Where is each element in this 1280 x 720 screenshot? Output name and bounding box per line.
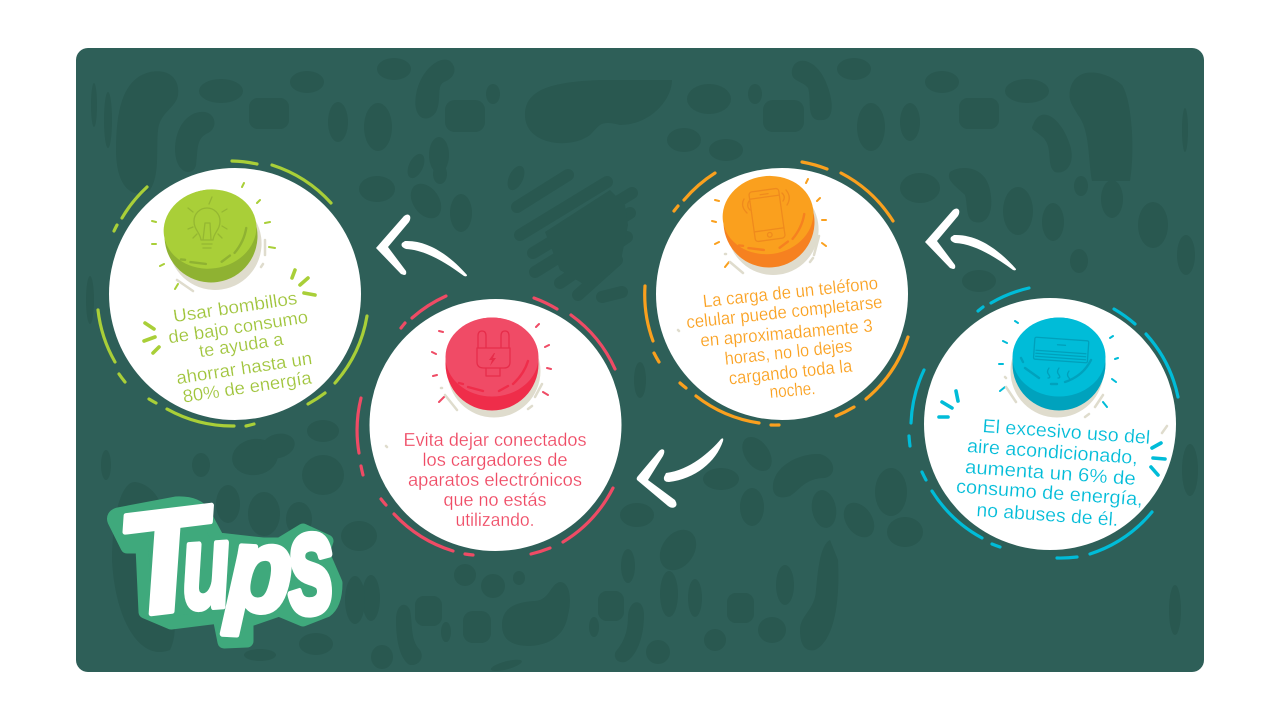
text: tip 4: aumenta un 6% de bbox=[964, 457, 1136, 490]
button bbox=[158, 183, 268, 296]
text: tip 1: Usar bombillos bbox=[172, 288, 298, 326]
text: tip 3: en aproximadamente 3 bbox=[699, 316, 874, 351]
accent sparks bbox=[144, 270, 315, 353]
button bbox=[446, 318, 540, 418]
white disc bbox=[109, 168, 361, 420]
text: tip 2: utilizando. bbox=[456, 510, 534, 530]
text: tip 3: noche. bbox=[769, 378, 816, 402]
text: tip 2: los cargadores de bbox=[422, 450, 568, 470]
dashed ring bbox=[357, 296, 615, 555]
circle: tip 2 chargers bbox=[357, 296, 622, 555]
text: tip 3: celular puede completarse bbox=[685, 292, 883, 332]
arrow: red to green bbox=[376, 214, 467, 276]
text: tip 1 bbox=[167, 288, 314, 407]
shadow marks bbox=[678, 236, 819, 331]
title letters: u bbox=[176, 498, 235, 635]
circle: tip 1 light bulbs bbox=[98, 161, 367, 426]
text: tip 2: Evita dejar conectados bbox=[404, 430, 586, 450]
white disc bbox=[656, 168, 908, 420]
shadow marks bbox=[386, 384, 542, 447]
panel: dark green background bbox=[76, 48, 1204, 672]
title backing shape bbox=[114, 503, 336, 642]
text: tip 3: La carga de un teléfono bbox=[702, 273, 879, 311]
white disc bbox=[370, 299, 622, 551]
shadow marks bbox=[177, 240, 265, 291]
icon: bolt bbox=[489, 353, 496, 366]
button bbox=[1010, 318, 1106, 418]
text: tip 2: que no estás bbox=[444, 490, 546, 510]
dashed ring bbox=[98, 161, 367, 426]
text: tip 4: consumo de energía, bbox=[955, 477, 1143, 511]
icon: air conditioner bbox=[1033, 337, 1089, 381]
shadow marks bbox=[1005, 377, 1167, 433]
title letters: s bbox=[281, 480, 339, 646]
text: tip 4 bbox=[955, 416, 1151, 531]
text: tip 2 bbox=[404, 430, 586, 530]
icon: light bulb bbox=[188, 197, 227, 248]
arrow: orange to red bbox=[637, 438, 723, 508]
button bbox=[718, 170, 824, 281]
text: tip 1: ahorrar hasta un bbox=[175, 348, 313, 388]
white disc bbox=[924, 298, 1176, 550]
text: tip 1: 80% de energía bbox=[181, 367, 314, 407]
rays bbox=[712, 179, 826, 267]
dashed ring bbox=[645, 162, 908, 425]
text: tip 3: horas, no lo dejes bbox=[724, 335, 853, 369]
accent sparks bbox=[939, 391, 1165, 475]
text: tip 2: aparatos electrónicos bbox=[408, 470, 582, 490]
rays bbox=[152, 183, 275, 289]
text: tip 1: te ayuda a bbox=[198, 329, 286, 361]
rays bbox=[999, 321, 1118, 407]
text: tip 3: cargando toda la bbox=[728, 356, 854, 388]
title letters: T bbox=[109, 474, 228, 648]
dashed ring bbox=[909, 288, 1178, 558]
title: Tips bbox=[109, 474, 339, 648]
circle: tip 4 air conditioner bbox=[909, 288, 1178, 558]
arrow: blue to orange bbox=[925, 208, 1016, 270]
text: tip 3 bbox=[685, 273, 883, 402]
title letters bbox=[109, 474, 339, 648]
text: tip 1: de bajo consumo bbox=[167, 307, 309, 347]
rays bbox=[432, 324, 551, 402]
icon: phone bbox=[743, 188, 789, 242]
text: tip 4: El excesivo uso del bbox=[982, 416, 1151, 449]
title letters: p bbox=[222, 500, 296, 638]
icon: plug bbox=[477, 331, 510, 376]
circle: tip 3 phone bbox=[645, 162, 908, 425]
text: tip 4: no abuses de él. bbox=[976, 500, 1119, 531]
text: tip 4: aire acondicionado, bbox=[966, 436, 1138, 469]
